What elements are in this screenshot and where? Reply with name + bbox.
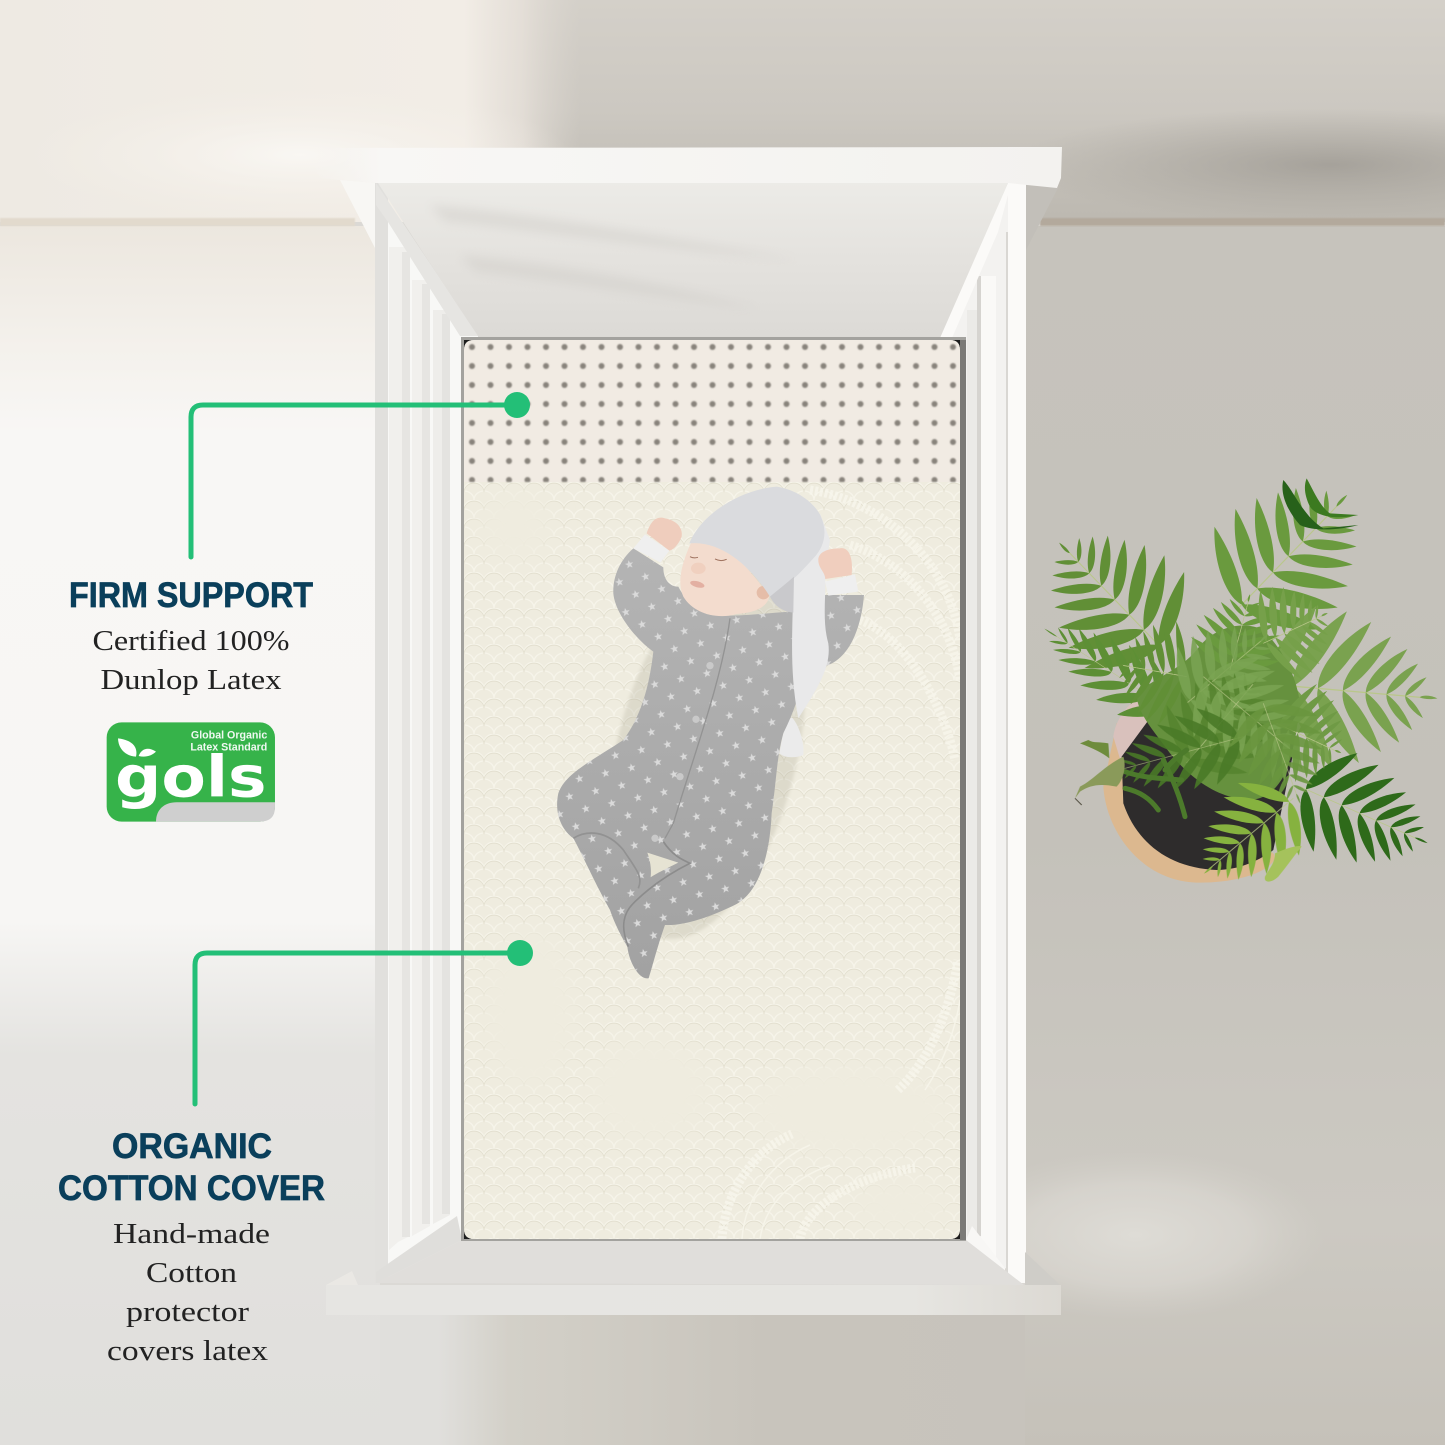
central foliage mass <box>1137 625 1300 800</box>
mouth <box>689 580 705 589</box>
latex core with pinholes <box>464 340 960 482</box>
text: hand-made cotton protector: Cotton <box>146 1257 238 1289</box>
text: certified latex: Certified 100% <box>92 625 290 657</box>
sleepsuit with stars <box>557 548 864 978</box>
right diagonal brace <box>940 183 1008 338</box>
leaves <box>118 738 156 757</box>
logo: GOLS badge: Latex Standard <box>190 742 267 754</box>
text: hand-made cotton protector: covers latex <box>107 1335 269 1367</box>
crib right side with bars <box>942 183 1060 1285</box>
crib top rail <box>305 147 1062 188</box>
crib bottom rail <box>326 1240 1061 1315</box>
left fist <box>647 518 682 551</box>
gap between legs <box>647 853 678 877</box>
callout line: firm support <box>191 392 530 557</box>
right fist <box>818 548 852 579</box>
right cuff <box>825 574 858 596</box>
text: hand-made cotton protector: Hand-made <box>113 1218 270 1250</box>
heading: organic cotton cover <box>58 1127 325 1208</box>
tassel <box>779 717 804 757</box>
terracotta pot rim <box>1103 723 1275 883</box>
text: hand-made cotton protector <box>107 1218 270 1367</box>
hat fold shadow <box>770 577 794 613</box>
lower left dry leaf <box>1075 757 1125 798</box>
stems over soil <box>1125 750 1187 817</box>
panel shadow streaks <box>430 205 800 310</box>
hat <box>689 487 824 597</box>
fronds <box>1007 441 1445 912</box>
soil <box>1122 700 1297 870</box>
callout line: organic cotton cover <box>195 940 533 1104</box>
baby sleeping <box>557 487 864 978</box>
heading: organic cotton cover: COTTON COVER <box>58 1169 325 1208</box>
left diagonal brace <box>376 183 478 336</box>
organic cotton cover surface <box>464 470 960 1240</box>
sleeping eyes <box>690 557 727 561</box>
crib <box>305 147 1062 1315</box>
crib left side with bars <box>340 180 478 1283</box>
lower bright sprig <box>1265 846 1302 882</box>
pink pot rim, upper <box>1113 683 1197 770</box>
text: certified latex: Dunlop Latex <box>100 664 282 696</box>
heading: organic cotton cover: ORGANIC <box>112 1127 272 1166</box>
text: certified latex <box>92 625 290 696</box>
logo: GOLS badge <box>107 722 275 822</box>
left cuff <box>633 534 669 563</box>
mattress <box>461 337 966 1241</box>
heading: firm support: FIRM SUPPORT <box>69 576 313 615</box>
logo: GOLS badge: Global Organic <box>191 729 267 741</box>
hat tail <box>792 513 830 718</box>
logo: GOLS badge: gols <box>115 744 267 811</box>
text: hand-made cotton protector: protector <box>126 1296 249 1328</box>
potted fern plant <box>1007 441 1445 912</box>
face <box>680 538 769 616</box>
crib top inner panel <box>378 183 1008 336</box>
